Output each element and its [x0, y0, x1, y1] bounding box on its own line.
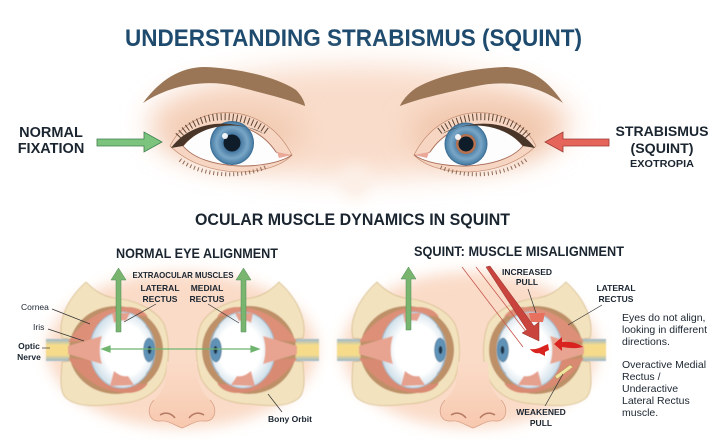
label: weakened pull: [516, 374, 566, 428]
thin red lines: [462, 267, 530, 347]
label: medial rectus: [190, 283, 239, 323]
panel: normal eye alignment: [17, 245, 319, 428]
right eye: [414, 113, 536, 174]
explanation text: [622, 312, 707, 419]
label: medial rectus: RECTUS: [190, 294, 225, 304]
label: bony orbit: [268, 394, 312, 424]
title: UNDERSTANDING STRABISMUS (SQUINT): [125, 25, 582, 52]
label: strabismus: EXOTROPIA: [630, 158, 694, 170]
section heading: OCULAR MUSCLE DYNAMICS IN SQUINT: [195, 211, 510, 229]
panel heading: NORMAL EYE ALIGNMENT: [116, 245, 278, 261]
panel heading: SQUINT: MUSCLE MISALIGNMENT: [414, 243, 624, 259]
right eyebrow: [400, 67, 563, 106]
label: weakened pull: WEAKENED: [516, 407, 566, 417]
label: increased pull: PULL: [516, 277, 538, 287]
label: medial rectus: MEDIAL: [191, 283, 223, 293]
left vertical arrow: [111, 268, 126, 332]
explanation text: Eyes do not align,: [622, 312, 705, 324]
label: lateral rectus: [568, 283, 636, 325]
label: increased pull: INCREASED: [502, 267, 552, 277]
explanation text: Lateral Rectus: [622, 395, 690, 407]
arrow: normal fixation: [97, 132, 162, 152]
face skin: [148, 66, 572, 200]
label: lateral rectus: RECTUS: [599, 294, 634, 304]
label: strabismus: STRABISMUS: [616, 123, 708, 139]
label: iris: [33, 322, 84, 341]
explanation text: directions.: [622, 336, 670, 348]
left eye anatomy: [337, 282, 460, 406]
nose: [149, 362, 215, 428]
label: lateral rectus: RECTUS: [143, 294, 178, 304]
label: lateral rectus: [124, 283, 180, 322]
label: optic nerve: Optic: [18, 341, 40, 351]
weakened muscle marker: [555, 365, 573, 379]
right eye anatomy with misaligned gaze: [484, 282, 606, 406]
explanation text: looking in different: [622, 324, 707, 336]
label: lateral rectus: LATERAL: [596, 283, 636, 293]
label: weakened pull: PULL: [530, 418, 552, 428]
explanation text: Overactive Medial: [622, 359, 706, 371]
label: normal fixation: FIXATION: [18, 141, 84, 157]
skin background: [342, 272, 598, 428]
skin background: [47, 272, 317, 428]
label: iris: Iris: [33, 322, 44, 332]
horizontal alignment arrow: [102, 346, 259, 352]
left eyebrow: [143, 67, 305, 106]
left eye anatomy: [46, 282, 168, 406]
label: cornea: [21, 302, 90, 324]
thick red arrow: [486, 266, 539, 341]
panel: squint muscle misalignment: [337, 243, 707, 428]
label: extraocular muscles: EXTRAOCULAR MUSCLES: [132, 270, 234, 280]
label: strabismus: [616, 123, 708, 170]
right vertical arrow: [236, 268, 251, 332]
label: cornea: Cornea: [21, 302, 49, 312]
explanation text: muscle.: [622, 407, 658, 419]
label: increased pull: [502, 267, 552, 313]
nose: [440, 362, 506, 428]
vertical arrow: [401, 267, 416, 330]
label: optic nerve: [17, 341, 50, 362]
increased pull muscle: [529, 313, 545, 322]
label: lateral rectus: LATERAL: [140, 283, 180, 293]
illustration: face with both eyes: [143, 66, 572, 200]
right eye anatomy: [196, 282, 319, 406]
red muscle indicators: [530, 337, 583, 356]
label: optic nerve: Nerve: [17, 352, 41, 362]
label: strabismus: (SQUINT): [630, 140, 694, 156]
left eye: [170, 113, 292, 174]
arrow: strabismus: [545, 132, 609, 152]
label: bony orbit: Bony Orbit: [268, 414, 312, 424]
explanation text: Underactive: [622, 383, 678, 395]
explanation text: Rectus /: [622, 371, 661, 383]
label: normal fixation: NORMAL: [19, 125, 83, 141]
